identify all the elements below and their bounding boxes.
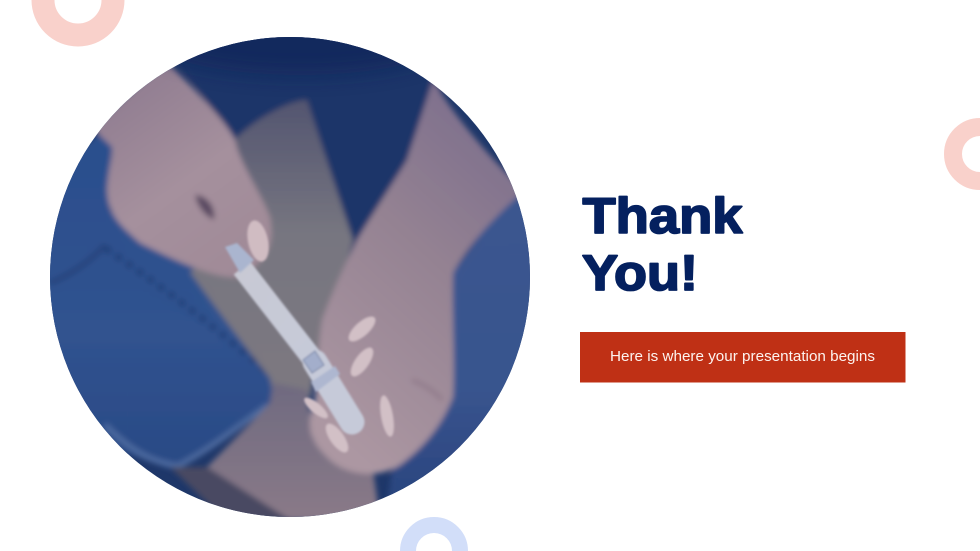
shadow on right hand crease	[416, 381, 440, 398]
decorative ring: bottom	[408, 525, 460, 551]
shadow between left fingers	[195, 195, 214, 220]
photo background: dark jeans	[50, 37, 530, 517]
pen ring	[311, 366, 340, 392]
pen cap	[225, 243, 254, 273]
decorative ring: top left	[43, 0, 113, 35]
jeans seam	[105, 247, 255, 362]
title line 1: Thank	[582, 188, 743, 244]
fingernails: right hand	[301, 312, 397, 456]
left jeans leg	[30, 133, 272, 470]
banner text: Here is where your presentation begins	[610, 349, 875, 365]
hem seam	[105, 405, 268, 466]
title	[582, 188, 743, 301]
pen window	[303, 351, 324, 373]
dark shape at bottom left	[170, 467, 290, 520]
decorative ring: right	[953, 127, 980, 181]
pen lower body	[315, 362, 352, 422]
circular photo: hands holding insulin pen	[50, 37, 530, 517]
right arm and hand	[310, 80, 525, 474]
subtitle banner	[580, 332, 906, 382]
pen body	[242, 268, 315, 362]
banner background	[580, 332, 906, 382]
title line 2: You!	[582, 245, 698, 301]
left hand	[92, 60, 272, 277]
right jeans	[386, 196, 530, 497]
carpet between legs	[190, 100, 353, 398]
dark jeans at top	[178, 37, 442, 252]
top darkening	[170, 37, 408, 76]
fingernail: left thumb	[246, 220, 270, 263]
lower leg skin	[207, 383, 380, 520]
pocket shadow	[50, 245, 105, 283]
